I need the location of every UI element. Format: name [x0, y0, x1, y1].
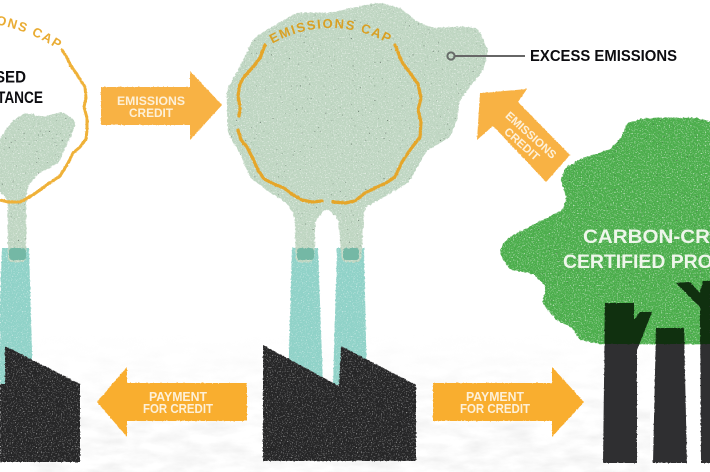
arrow: payment for credit, rightward: FOR CREDIT — [460, 402, 530, 416]
arrow: emissions credit from project: CREDIT — [501, 126, 541, 164]
excess emissions marker — [447, 52, 525, 60]
tree canopy — [500, 118, 710, 344]
arrow: emissions credit to middle: EMISSIONS — [117, 94, 185, 108]
middle chimneys — [288, 248, 367, 385]
arrow: payment for credit, rightward: PAYMENT — [466, 390, 524, 404]
left chimney — [0, 248, 32, 384]
arrow: payment for credit, leftward: PAYMENT — [149, 390, 207, 404]
canopy label: CERTIFIED PRO — [563, 251, 710, 273]
emissions cap ring — [238, 45, 421, 203]
arrow: payment for credit, rightward — [433, 367, 584, 437]
trunk overlap with canopy — [604, 280, 710, 344]
arrow: payment for credit, leftward — [97, 367, 247, 437]
arrow: emissions credit to middle — [101, 71, 222, 140]
excess emissions label: EXCESS EMISSIONS — [530, 48, 677, 65]
panel: middle factory with excess emissions — [226, 2, 710, 462]
arrow: emissions credit to middle: CREDIT — [129, 106, 174, 120]
middle factory — [263, 345, 416, 461]
left allowance label — [0, 68, 43, 107]
tree trunks — [603, 281, 710, 463]
arrow: emissions credit from project: EMISSIONS — [503, 110, 558, 162]
canopy label: CARBON-CR — [583, 226, 710, 248]
chimney overlaps — [297, 248, 359, 260]
left emissions cloud — [0, 112, 76, 262]
left chimney overlap — [9, 248, 26, 260]
middle emissions cloud — [227, 3, 488, 262]
left factory — [0, 346, 80, 462]
canopy label — [563, 226, 710, 273]
emissions cap label: EMISSIONS CAP — [269, 19, 391, 44]
mottled ground texture — [30, 335, 650, 472]
left emissions cap ring — [0, 50, 87, 202]
panel: left factory with reduced emissions — [0, 16, 89, 462]
arrow: emissions credit from project — [477, 89, 570, 182]
panel: carbon-credit certified project — [500, 118, 710, 463]
arrow: payment for credit, leftward: FOR CREDIT — [143, 402, 213, 416]
